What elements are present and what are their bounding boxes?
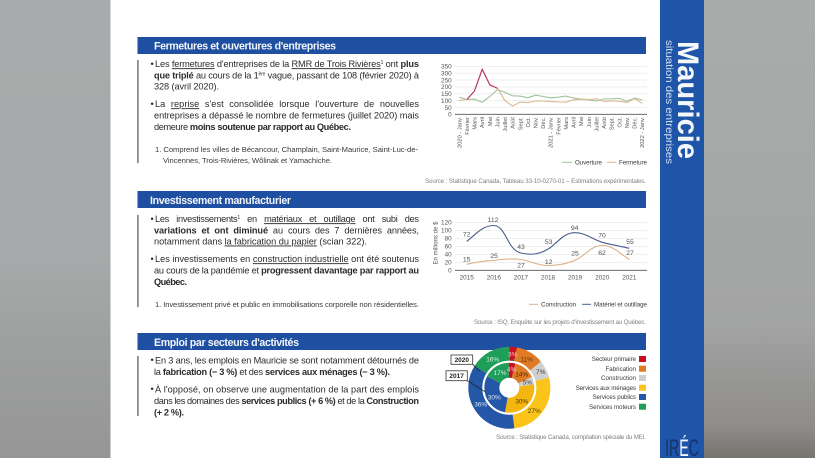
callout: 2017: 2017: [449, 373, 464, 380]
x axis months: Juin: [587, 117, 593, 127]
text block: investissements: •: [150, 214, 154, 224]
legend: ouverture fermeture: Fermeture: [619, 160, 648, 166]
text block: fermetures: ère: [259, 71, 266, 77]
text block: investissements: au cours de la pandémie et progressent davantage par rapport au: [154, 266, 419, 276]
text block: investissements: en: [240, 214, 264, 224]
side subtitle: situation des entreprises: [663, 40, 674, 164]
text block: investissements: Québec.: [154, 277, 187, 287]
donut chart: emplois 2017 et 2020: 5%: [523, 380, 532, 387]
text block: investissements: matériaux et outillage ont subi des: [264, 214, 419, 224]
x axis months: Août: [602, 117, 608, 129]
footnote: villes: 1. Comprend les villes de Bécancour, Champlain, Saint-Maurice, Saint-Luc-de-: [155, 145, 418, 154]
donut chart: emplois 2017 et 2020: 27%: [528, 408, 541, 415]
x axis months: Juillet: [594, 117, 600, 132]
x axis months: Février: [465, 117, 471, 135]
legend: secteurs: Services aux ménages: [576, 385, 636, 392]
line chart: ouverture et fermeture: 200: [441, 84, 452, 91]
x axis months: [457, 117, 646, 148]
x axis months: Février: [556, 117, 562, 135]
heading: investissement manufacturier: [138, 191, 646, 208]
text block: fermetures: demeure moins soutenue par rapport au Québec.: [154, 122, 351, 132]
series: fermeture: [497, 88, 642, 106]
legend: secteurs: [576, 356, 646, 411]
text block: fermetures: que triplé au cours de la 1: [154, 70, 259, 80]
donut chart: emplois 2017 et 2020: 30%: [488, 395, 501, 402]
series: matériel et outillage: [467, 226, 629, 254]
source: Statistique Canada: Source : Statistique Canada, Tableau 33-10-0270-01 – Estimations expérimentales.: [425, 178, 646, 185]
line chart: investissements: 15: [463, 256, 471, 263]
text block: emploi: •: [150, 355, 154, 365]
donut chart: emplois 2017 et 2020: 14%: [515, 371, 528, 378]
footnote: villes: [155, 145, 418, 165]
legend: ouverture fermeture: Ouverture: [575, 160, 603, 166]
text block: emploi: la fabrication (− 3 %) et des services aux ménages (− 3 %).: [154, 367, 390, 377]
line chart: investissements: 43: [517, 244, 525, 251]
inner ring 2017: [492, 370, 527, 405]
x axis months: Avril: [572, 117, 578, 128]
line chart: investissements: 25: [490, 253, 498, 260]
side panel: title band: [660, 0, 704, 458]
text block: investissements: variations et ont diminué au cours des 7 dernières années,: [154, 225, 419, 235]
line chart: ouverture et fermeture: 350: [441, 64, 452, 71]
heading: investissement manufacturier: Investissement manufacturier: [150, 195, 291, 207]
donut chart: emplois 2017 et 2020: 30%: [515, 399, 528, 406]
outer ring 2020: [475, 354, 543, 422]
line chart: investissements: 55: [626, 239, 634, 246]
legend: construction matériel: Matériel et outillage: [594, 302, 648, 308]
x axis months: Déc.: [541, 117, 547, 129]
callout: 2017: [446, 371, 485, 392]
heading: fermetures et ouvertures: [138, 37, 646, 54]
x axis months: Sept.: [610, 117, 616, 130]
series: fermeture pic: [467, 69, 497, 100]
donut chart: emplois 2017 et 2020: 17%: [493, 370, 507, 377]
series: ouverture: [459, 90, 642, 102]
line chart: ouverture et fermeture: [441, 64, 648, 166]
donut chart: emplois 2017 et 2020: 36%: [474, 402, 487, 409]
line chart: investissements: 0: [448, 268, 452, 275]
legend: ouverture fermeture: [562, 160, 648, 166]
text block: fermetures: [150, 59, 420, 132]
x axis months: Mai: [488, 117, 494, 126]
text block: emploi: En 3 ans, les emplois en Mauricie se sont notamment détournés de: [155, 355, 419, 365]
text block: fermetures: •: [150, 59, 154, 69]
line chart: investissements: 12: [545, 259, 553, 266]
legend: secteurs: Fabrication: [606, 366, 637, 373]
callout: 2020: 2020: [455, 357, 469, 364]
heading: emploi par secteurs: Emploi par secteurs d'activités: [154, 337, 299, 349]
panel: emploi par secteurs: [137, 333, 646, 441]
text block: fermetures: •: [150, 99, 154, 109]
text block: fermetures: La reprise s'est consolidée lorsque l'ouverture de nouvelles: [155, 99, 419, 109]
donut chart: emplois 2017 et 2020: 7%: [536, 369, 546, 376]
legend: secteurs: Secteur primaire: [592, 356, 637, 363]
source: compilation MEI: Source : Statistique Canada, compilation spéciale du MEI.: [496, 434, 646, 441]
donut chart: emplois 2017 et 2020: 4%: [507, 366, 517, 373]
x axis months: 2021 - Janv.: [549, 117, 555, 148]
donut chart: emplois 2017 et 2020: 11%: [520, 356, 533, 363]
text block: fermetures: 328 (avril 2020).: [154, 82, 219, 92]
x axis months: Juin: [495, 117, 501, 127]
background: left grey band: [0, 0, 110, 458]
x axis months: Juillet: [503, 117, 509, 132]
text block: emploi: (+ 2 %).: [154, 407, 184, 417]
line chart: ouverture et fermeture: 100: [441, 98, 452, 105]
text block: fermetures: plus: [400, 59, 419, 69]
text block: emploi: À l'opposé, on observe une augmentation de la part des emplois: [155, 384, 419, 394]
footnote: villes: Vincennes, Trois-Rivières, Wôlinak et Yamachiche.: [163, 156, 332, 165]
line chart: investissements: 2015: [460, 274, 474, 282]
side title: Mauricie: Mauricie: [671, 41, 704, 159]
x axis months: Mars: [472, 117, 478, 130]
heading: fermetures et ouvertures: Fermetures et ouvertures d'entreprises: [154, 40, 336, 52]
legend: secteurs: Services publics: [592, 394, 636, 401]
line chart: investissements: 2018: [541, 274, 556, 282]
text block: fermetures: 1: [381, 60, 384, 66]
text block: fermetures: vague, passant de 108 (février 2020) à: [265, 70, 420, 80]
x axis months: Mars: [564, 117, 570, 130]
callout: 2020: [451, 355, 480, 371]
text block: fermetures: ont: [383, 59, 401, 69]
line chart: ouverture et fermeture: 50: [445, 105, 452, 112]
text block: investissements: [150, 214, 419, 287]
line chart: investissements: 2016: [487, 274, 501, 282]
text block: fermetures: entreprises a dépassé le nombre de fermetures (juillet 2020) mais: [154, 110, 419, 120]
line chart: investissements: 27: [517, 262, 525, 269]
line chart: investissements: 100: [441, 228, 452, 235]
line chart: investissements: 62: [598, 250, 606, 257]
x axis months: Oct.: [617, 117, 623, 127]
text block: investissements: Les investissements: [155, 214, 238, 224]
heading: emploi par secteurs: [138, 333, 646, 350]
line chart: investissements: 53: [545, 239, 553, 246]
line chart: investissements: 20: [445, 260, 452, 267]
text block: emploi: dans les domaines des services publics (+ 6 %) et de la Construction: [154, 396, 419, 406]
panel: fermetures et ouvertures: [137, 37, 648, 185]
footnote: investissement: 1. Investissement privé et public en immobilisations corporelle non résidentielles.: [155, 300, 419, 309]
line chart: investissements: 2017: [514, 274, 528, 282]
x axis months: Déc.: [633, 117, 639, 129]
legend: secteurs: Construction: [601, 375, 637, 382]
line chart: investissements: 40: [445, 252, 452, 259]
text block: investissements: Les investissements en construction industrielle ont été soutenus: [155, 254, 419, 264]
x axis months: 2022 - Janv.: [640, 117, 646, 148]
series: construction: [467, 246, 629, 266]
text block: investissements: 1: [237, 215, 240, 221]
x axis months: Août: [511, 117, 517, 129]
source: ISQ: Source : ISQ, Enquête sur les projets d'investissement au Québec.: [474, 319, 646, 326]
text block: investissements: notamment dans la fabrication du papier (scian 322).: [154, 236, 367, 246]
legend: secteurs: Services moteurs: [589, 404, 636, 411]
line chart: investissements: 94: [571, 225, 579, 232]
line chart: investissements: 112: [488, 217, 499, 224]
line chart: ouverture et fermeture: 0: [448, 112, 452, 119]
x axis months: Oct.: [526, 117, 532, 127]
line chart: investissements: [434, 217, 648, 308]
line chart: investissements: 80: [445, 236, 452, 243]
donut chart: emplois 2017 et 2020: 3%: [508, 352, 518, 359]
text block: fermetures: Les fermetures d'entreprises de la RMR de Trois Rivières: [155, 59, 381, 69]
line chart: ouverture et fermeture: 150: [441, 91, 452, 98]
line chart: investissements: 72: [463, 232, 471, 238]
line chart: investissements: 25: [571, 251, 579, 258]
line chart: ouverture et fermeture: 250: [441, 77, 452, 84]
line chart: investissements: 2021: [622, 274, 637, 282]
x axis months: Nov.: [625, 117, 631, 128]
line chart: investissements: 2020: [595, 274, 610, 282]
line chart: investissements: 2019: [568, 274, 583, 282]
x axis months: Sept.: [518, 117, 524, 130]
text block: investissements: •: [150, 254, 154, 264]
x axis months: 2020 - Janv.: [457, 117, 463, 148]
x axis months: Avril: [480, 117, 486, 128]
legend: construction matériel: Construction: [541, 302, 577, 308]
line chart: investissements: 60: [445, 244, 452, 251]
line chart: ouverture et fermeture: 300: [441, 70, 452, 78]
line chart: investissements: 70: [598, 232, 606, 239]
panel: investissement manufacturier: [137, 191, 648, 326]
y axis title: En millions de $: [434, 221, 440, 264]
donut chart: emplois 2017 et 2020: 16%: [486, 356, 499, 363]
text block: emploi: •: [150, 384, 154, 394]
line chart: investissements: 27: [626, 250, 634, 257]
x axis months: Nov.: [534, 117, 540, 128]
white slide page: [110, 0, 660, 458]
text block: emploi: [150, 355, 419, 417]
donut chart: emplois 2017 et 2020: [474, 352, 546, 422]
background: right grey band: [704, 0, 815, 458]
x axis months: Mai: [579, 117, 585, 126]
line chart: investissements: 120: [441, 220, 452, 227]
legend: construction matériel: [529, 302, 648, 308]
